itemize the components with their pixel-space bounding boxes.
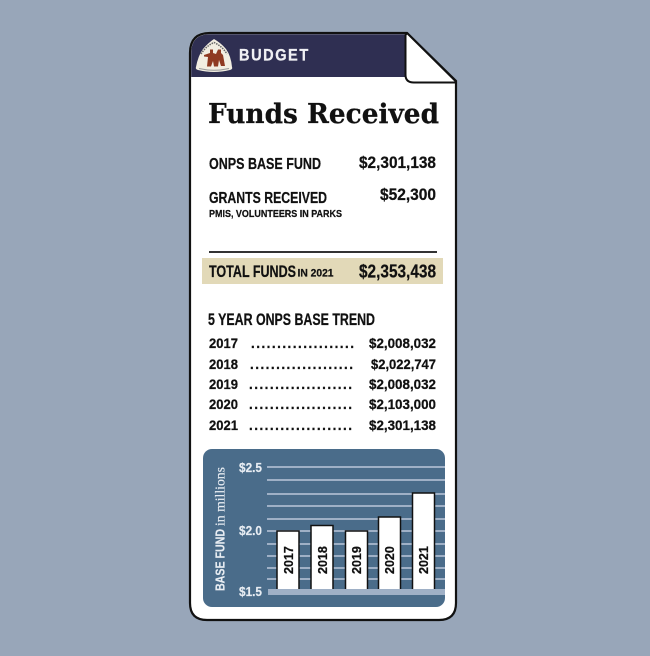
trend table: .................... [250, 357, 353, 372]
y axis labels: $2.0 [239, 524, 262, 538]
row: grants received: GRANTS RECEIVED [209, 190, 327, 207]
row: ONPS base fund: ONPS BASE FUND [209, 156, 321, 173]
trend table: 2017 [209, 336, 238, 351]
bar chart [203, 449, 445, 607]
panel: budget page [190, 33, 456, 620]
trend table: 2019 [209, 377, 238, 392]
total funds band: TOTAL FUNDS [209, 262, 296, 281]
row: grants received: $52,300 [380, 185, 436, 204]
trend table: 2018 [209, 357, 238, 372]
trend table: $2,301,138 [369, 418, 436, 433]
heading: Funds Received: Funds Received [208, 99, 439, 130]
row: grants received [209, 185, 436, 220]
trend table [209, 336, 436, 433]
trend table: $2,008,032 [369, 336, 436, 351]
bar labels: 2018 [316, 546, 330, 574]
row: ONPS base fund: $2,301,138 [359, 153, 436, 172]
total funds band [202, 258, 443, 284]
page fold [406, 33, 456, 82]
icon: trail shield logo [196, 39, 232, 72]
heading: 5 year trend: 5 YEAR ONPS BASE TREND [208, 311, 375, 329]
trend table: 2021 [209, 418, 238, 433]
y axis labels [239, 461, 262, 599]
trend table: .................... [251, 336, 354, 351]
y axis labels: $2.5 [239, 461, 262, 475]
total funds band: $2,353,438 [359, 262, 436, 282]
bar labels: 2017 [282, 546, 296, 574]
y axis title: BASE FUND [214, 529, 228, 591]
y axis title: in millions [212, 467, 228, 526]
bar labels: 2019 [350, 546, 364, 574]
y axis labels: $1.5 [239, 585, 262, 599]
trend table: $2,103,000 [369, 397, 436, 412]
bar labels [282, 546, 431, 574]
total funds band: IN 2021 [298, 268, 334, 280]
trend table: $2,022,747 [371, 357, 436, 372]
trend table: .................... [249, 397, 352, 412]
header band [191, 34, 406, 77]
trend table: .................... [249, 377, 352, 392]
y axis title [212, 467, 228, 591]
header title: BUDGET [239, 47, 310, 65]
row: grants received: PMIS, VOLUNTEERS IN PARKS [209, 208, 342, 220]
trend table: .................... [249, 418, 352, 433]
row: ONPS base fund [209, 153, 436, 173]
bar labels: 2021 [417, 546, 431, 574]
trend table: 2020 [209, 397, 238, 412]
trend table: $2,008,032 [369, 377, 436, 392]
bars [277, 493, 434, 591]
bar labels: 2020 [383, 546, 397, 574]
